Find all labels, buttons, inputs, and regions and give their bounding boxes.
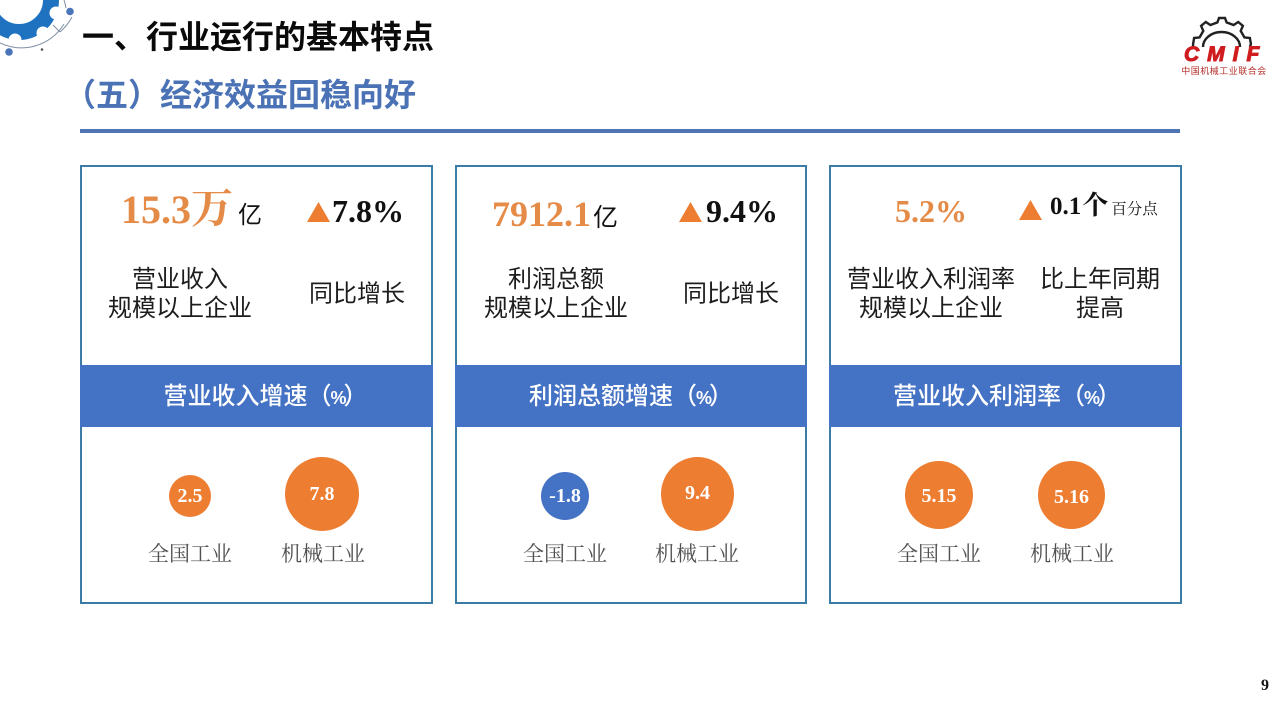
bubble: national -1.8: -1.8 [549,485,581,507]
bubble: machinery 9.4 [661,457,734,531]
subtitle: （五）经济效益回稳向好 [64,77,416,113]
revenue growth value: 7.8% [332,193,404,229]
band: revenue growth [80,365,433,427]
icon: CMIF logo [1181,16,1267,76]
caption: machinery: 机械工业 [1030,542,1114,566]
bubble: national -1.8 [541,472,589,520]
logo letters: CMIF [1184,43,1267,66]
change label [1040,266,1160,322]
profit label: 规模以上企业 [484,295,628,322]
margin label [847,266,1015,322]
bubble: national 2.5 [169,475,211,517]
revenue label: 营业收入 [132,266,228,293]
logo gear [1192,16,1252,47]
growth label: 同比增长 [683,280,779,308]
panel: margin [829,165,1182,604]
title: 一、行业运行的基本特点 [82,19,434,55]
profit label [484,266,628,322]
revenue label [108,266,252,322]
icon: up triangle [307,202,330,222]
bubble: machinery 5.16: 5.16 [1054,486,1089,508]
panel: revenue [80,165,433,604]
revenue headline value: 15.3万亿 [121,187,262,233]
band: margin [829,365,1182,427]
band: profit growth: 利润总额增速（%） [529,383,733,410]
revenue label: 规模以上企业 [108,295,252,322]
icon: corner gear decoration [0,0,74,56]
caption: machinery: 机械工业 [655,542,739,566]
icon: up triangle [1019,200,1042,220]
header rule [80,129,1180,133]
caption: machinery: 机械工业 [281,542,365,566]
profit headline value: 7912.1亿 [492,194,618,234]
profit label: 利润总额 [508,266,604,293]
page number: 9 [1261,677,1269,694]
logo caption: 中国机械工业联合会 [1181,66,1267,76]
bubble: machinery 5.16 [1038,461,1105,529]
change label: 比上年同期 [1040,266,1160,293]
growth label: 同比增长 [309,280,405,308]
band: revenue growth: 营业收入增速（%） [163,383,368,410]
band: profit growth [455,365,807,427]
profit growth value: 9.4% [706,193,778,229]
bubble: machinery 9.4: 9.4 [685,482,710,504]
margin headline value: 5.2% [895,193,967,229]
bubble: machinery 7.8: 7.8 [310,483,334,505]
bubble: national 5.15 [905,461,973,529]
caption: national: 全国工业 [897,542,981,566]
panel: profit [455,165,807,604]
bubble: national 5.15: 5.15 [922,485,956,507]
bubble: national 2.5: 2.5 [178,485,202,507]
margin label: 规模以上企业 [859,295,1003,322]
icon: up triangle [679,202,702,222]
margin change value: 0.1个百分点 [1050,191,1158,220]
caption: national: 全国工业 [148,542,232,566]
bubble: machinery 7.8 [285,457,359,531]
margin label: 营业收入利润率 [847,266,1015,293]
caption: national: 全国工业 [523,542,607,566]
change label: 提高 [1076,295,1124,322]
band: margin: 营业收入利润率（%） [893,383,1121,410]
